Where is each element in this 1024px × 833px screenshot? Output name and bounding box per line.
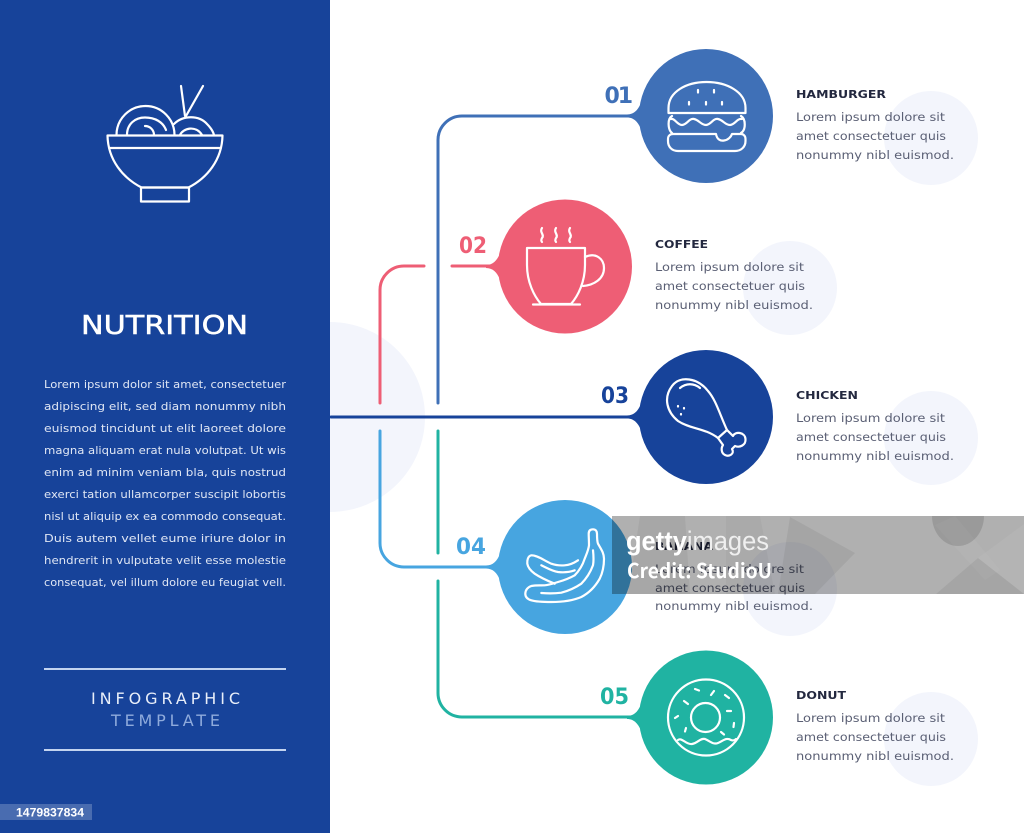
text block: intro paragraph: exerci tation ullamcorper suscipit lobortis	[44, 488, 286, 501]
text: donut: Lorem ipsum dolore sit	[796, 711, 946, 725]
text: banana: amet consectetuer quis	[655, 581, 805, 595]
text block: intro paragraph: adipiscing elit, sed diam nonummy nibh	[44, 400, 286, 413]
text: donut	[796, 689, 954, 763]
item 03: chicken: 03	[601, 384, 629, 409]
text block: intro paragraph: magna aliquam erat nula volutpat. Ut wis	[44, 444, 286, 457]
item 05: donut: 05	[600, 685, 629, 710]
text: chicken: Lorem ipsum dolore sit	[796, 411, 946, 425]
text: coffee	[655, 238, 813, 312]
icon: donut	[668, 680, 744, 756]
watermark text: Credit: StudioU	[627, 555, 772, 584]
item 04: banana: 04	[456, 535, 486, 560]
connector lines	[331, 116, 640, 717]
title: NUTRITION	[81, 311, 248, 341]
text block: intro paragraph: consequat, vel illum dolore eu feugiat vell.	[44, 576, 286, 589]
icon: noodle bowl	[108, 86, 222, 202]
text: hamburger	[796, 88, 954, 162]
icon: coffee cup	[527, 228, 604, 304]
image id tag: 1479837834	[16, 806, 84, 820]
item 03: chicken	[601, 350, 978, 485]
text: coffee: amet consectetuer quis	[655, 279, 805, 293]
text: chicken	[796, 389, 954, 463]
text: chicken: nonummy nibl euismod.	[796, 449, 954, 463]
text: donut: amet consectetuer quis	[796, 730, 946, 744]
text: banana: nonummy nibl euismod.	[655, 599, 813, 613]
text: coffee: Lorem ipsum dolore sit	[655, 260, 805, 274]
item 01: hamburger	[604, 49, 978, 185]
icon: bananas	[525, 529, 604, 602]
text: chicken: amet consectetuer quis	[796, 430, 946, 444]
text: hamburger: amet consectetuer quis	[796, 129, 946, 143]
text: donut: DONUT	[796, 689, 847, 702]
item 04: banana	[456, 500, 837, 636]
icon: hamburger	[668, 82, 746, 151]
text: banana	[655, 540, 813, 613]
subtitle	[91, 689, 240, 730]
subtitle: TEMPLATE	[110, 711, 220, 730]
text: coffee: nonummy nibl euismod.	[655, 298, 813, 312]
text: banana: Lorem ipsum dolore sit	[655, 562, 805, 576]
text: coffee: COFFEE	[655, 238, 708, 251]
text block: intro paragraph: euismod tincidunt ut elit laoreet dolore	[44, 422, 286, 435]
text: hamburger: nonummy nibl euismod.	[796, 148, 954, 162]
text: chicken: CHICKEN	[796, 389, 858, 402]
subtitle: INFOGRAPHIC	[91, 689, 240, 708]
text: banana: BANANA	[655, 540, 714, 553]
text block: intro paragraph	[44, 378, 286, 589]
panel: left sidebar	[0, 0, 330, 833]
text block: intro paragraph: enim ad minim veniam bla, quis nostrud	[44, 466, 286, 479]
item 02: coffee	[459, 200, 837, 335]
image id tag	[0, 804, 92, 820]
watermark text	[626, 526, 772, 584]
pale hub circle	[330, 322, 425, 512]
text block: intro paragraph: Lorem ipsum dolor sit amet, consectetuer	[44, 378, 286, 391]
item 02: coffee: 02	[459, 234, 487, 259]
watermark banner	[612, 516, 1024, 594]
item 01: hamburger: 01	[604, 84, 632, 109]
text: donut: nonummy nibl euismod.	[796, 749, 954, 763]
text block: intro paragraph: hendrerit in vulputate velit esse molestie	[44, 554, 286, 567]
text: hamburger: HAMBURGER	[796, 88, 887, 101]
icon: chicken leg	[667, 379, 746, 456]
text block: intro paragraph: nisl ut aliquip ex ea commodo consequat.	[44, 510, 286, 523]
text block: intro paragraph: Duis autem vellet eume iriure dolor in	[44, 532, 286, 545]
item 05: donut	[600, 650, 978, 786]
text: hamburger: Lorem ipsum dolore sit	[796, 110, 946, 124]
watermark text: gettyimages	[626, 526, 769, 556]
